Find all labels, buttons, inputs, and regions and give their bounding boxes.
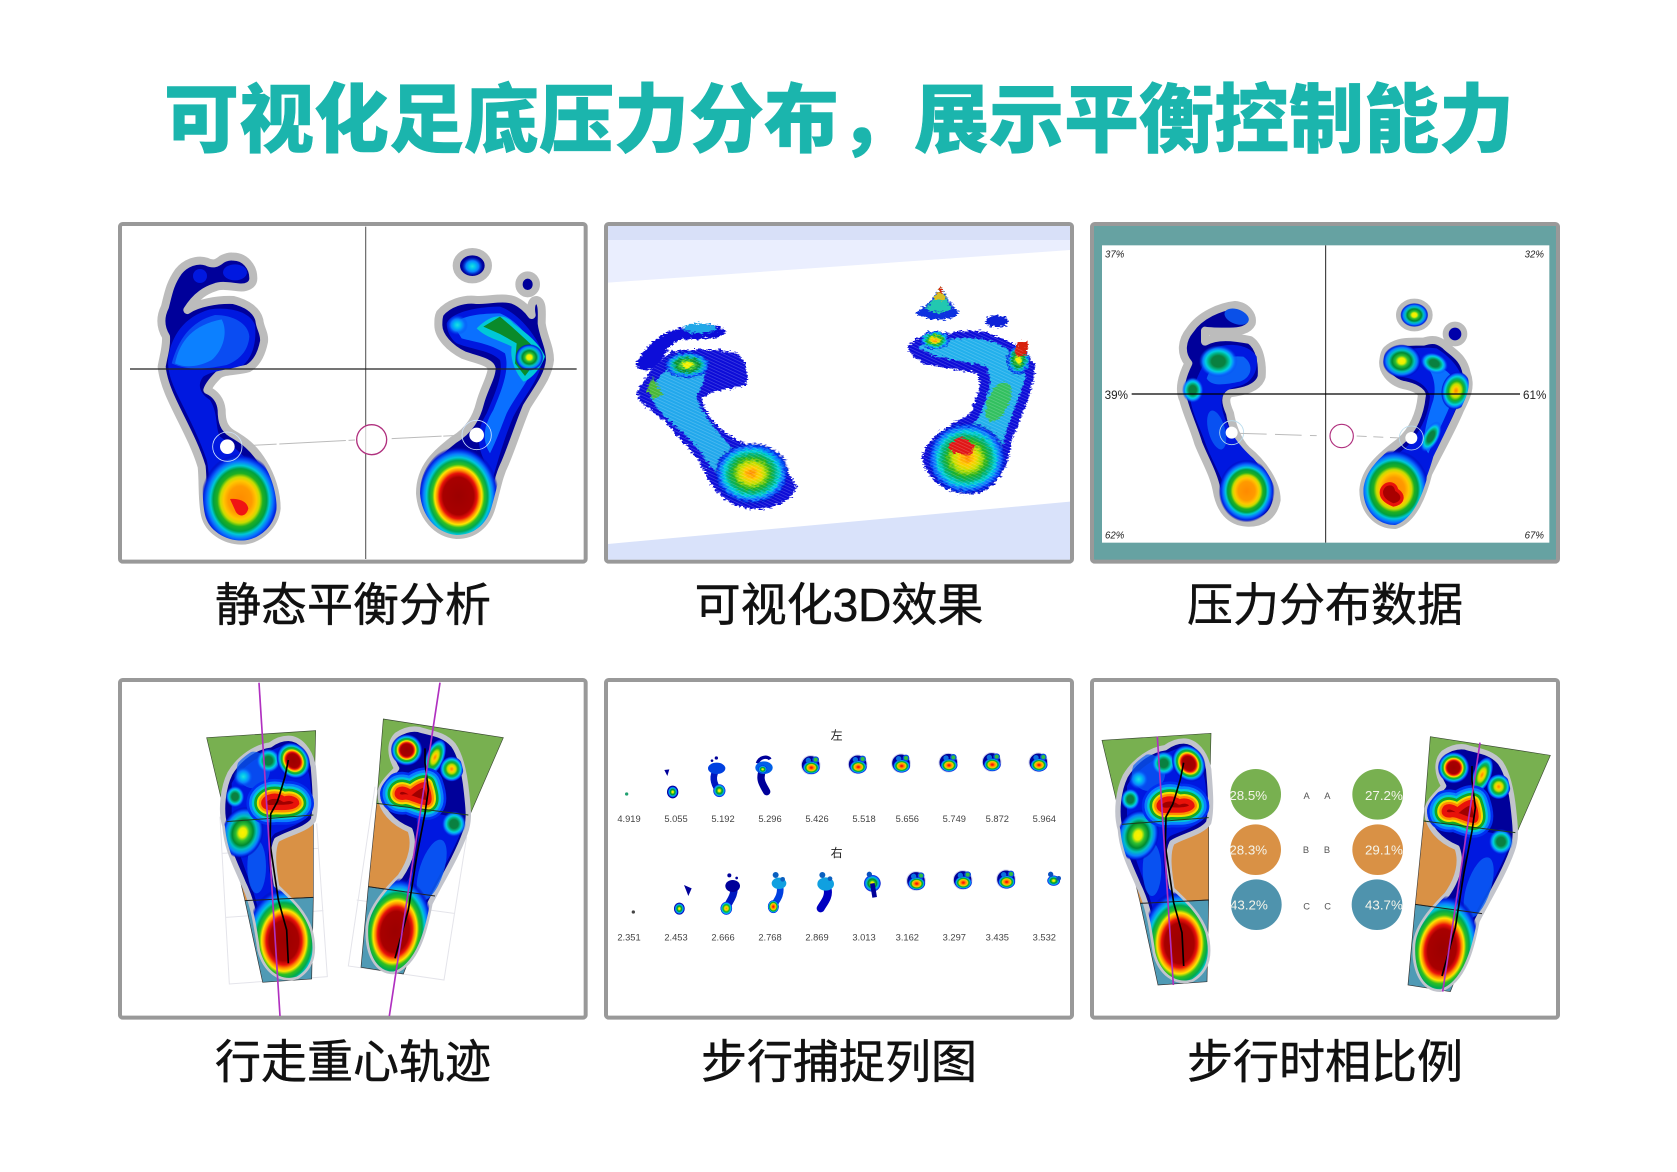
percentage labels: 32% bbox=[1525, 249, 1544, 260]
caption: 静态平衡分析 bbox=[215, 579, 491, 631]
right foot time labels: 3.297 bbox=[943, 932, 966, 942]
left foot time labels bbox=[617, 814, 1056, 824]
percentage labels bbox=[1105, 249, 1546, 542]
caption: 压力分布数据 bbox=[1187, 579, 1463, 631]
left foot frames bbox=[625, 753, 1048, 798]
phase circles right: 29.1% bbox=[1365, 843, 1403, 858]
floor background bands bbox=[608, 226, 1070, 560]
right foot time labels: 2.768 bbox=[758, 932, 782, 942]
phase labels bbox=[1303, 791, 1331, 911]
phase circles left bbox=[1229, 769, 1282, 930]
panel: static balance analysis bbox=[118, 222, 588, 564]
phase labels: C bbox=[1303, 901, 1310, 911]
caption: 步行时相比例 bbox=[1187, 1036, 1463, 1088]
panel: gait phase ratio bbox=[1090, 678, 1560, 1020]
phase circles left: 28.5% bbox=[1229, 788, 1267, 803]
panel: walking capture sequence bbox=[604, 678, 1074, 1020]
left foot time labels: 5.055 bbox=[664, 814, 688, 824]
phase labels: B bbox=[1324, 845, 1330, 855]
left foot zones map bbox=[1102, 733, 1218, 996]
caption: 行走重心轨迹 bbox=[215, 1036, 491, 1088]
foot surface hatch bbox=[637, 331, 1035, 509]
panel: pressure distribution data bbox=[1090, 222, 1560, 564]
left foot heat map bbox=[161, 256, 279, 546]
balance marker: left bbox=[220, 439, 235, 454]
left foot time labels: 5.296 bbox=[758, 814, 782, 824]
centre of gravity target bbox=[357, 425, 387, 455]
percentage labels: 39% bbox=[1105, 389, 1128, 402]
balance marker: right bbox=[469, 428, 484, 442]
right foot walking map bbox=[351, 719, 503, 990]
percentage labels: 37% bbox=[1105, 249, 1125, 260]
caption: 可视化3D效果 bbox=[695, 579, 983, 631]
panel: walking centre of gravity trajectory bbox=[118, 678, 588, 1020]
phase labels: A bbox=[1304, 791, 1311, 801]
crosshair lines bbox=[130, 227, 577, 559]
left foot time labels: 5.964 bbox=[1033, 814, 1056, 824]
left foot 3D surface bbox=[635, 323, 797, 509]
left foot time labels: 5.518 bbox=[852, 814, 876, 824]
left foot time labels: 4.919 bbox=[617, 814, 641, 824]
left foot time labels: 5.872 bbox=[986, 814, 1009, 824]
panel: 3D visualisation bbox=[604, 222, 1074, 564]
phase labels: B bbox=[1303, 845, 1309, 855]
left foot time labels: 5.192 bbox=[711, 814, 735, 824]
row label: left: 左 bbox=[831, 726, 843, 743]
foot axis lines bbox=[1157, 737, 1480, 992]
left foot walking map bbox=[207, 731, 323, 993]
right foot time labels: 3.013 bbox=[852, 932, 876, 942]
left foot time labels: 5.426 bbox=[805, 814, 829, 824]
right foot heat map bbox=[418, 252, 550, 545]
right foot time labels: 2.453 bbox=[664, 932, 688, 942]
faint foot grid bbox=[220, 787, 467, 984]
right foot zones map bbox=[1398, 737, 1550, 1008]
title: 可视化足底压力分布，展示平衡控制能力 bbox=[164, 78, 1514, 162]
foot axis lines bbox=[259, 683, 440, 1016]
balance marker: right bbox=[1405, 432, 1417, 444]
percentage labels: 67% bbox=[1525, 531, 1544, 542]
phase circles left: 43.2% bbox=[1230, 897, 1268, 912]
white chart area bbox=[1102, 245, 1549, 543]
right foot time labels: 3.435 bbox=[986, 932, 1009, 942]
left foot heat map bbox=[1181, 305, 1277, 523]
right foot frames bbox=[632, 870, 1061, 915]
phase circles right: 27.2% bbox=[1365, 788, 1403, 803]
right foot 3D surface bbox=[908, 286, 1035, 494]
phase circles right: 43.7% bbox=[1365, 897, 1403, 912]
phase circles right bbox=[1352, 769, 1403, 930]
percentage labels: 61% bbox=[1523, 389, 1546, 402]
phase labels: A bbox=[1324, 791, 1331, 801]
right foot time labels: 2.869 bbox=[805, 932, 829, 942]
caption: 步行捕捉列图 bbox=[701, 1036, 977, 1088]
crosshair lines bbox=[1132, 245, 1520, 543]
phase labels: C bbox=[1324, 901, 1331, 911]
right foot time labels: 3.162 bbox=[896, 932, 919, 942]
right foot time labels: 2.666 bbox=[711, 932, 735, 942]
right foot time labels: 2.351 bbox=[617, 932, 641, 942]
centre of gravity target bbox=[1330, 424, 1353, 448]
balance marker: left bbox=[1226, 427, 1238, 439]
left foot time labels: 5.749 bbox=[943, 814, 966, 824]
phase circles left: 28.3% bbox=[1229, 843, 1267, 858]
right foot time labels: 3.532 bbox=[1033, 932, 1056, 942]
row label: right: 右 bbox=[831, 844, 843, 861]
right foot heat map bbox=[1359, 302, 1474, 529]
right foot time labels bbox=[617, 932, 1056, 942]
percentage labels: 62% bbox=[1105, 531, 1125, 542]
left foot time labels: 5.656 bbox=[896, 814, 919, 824]
